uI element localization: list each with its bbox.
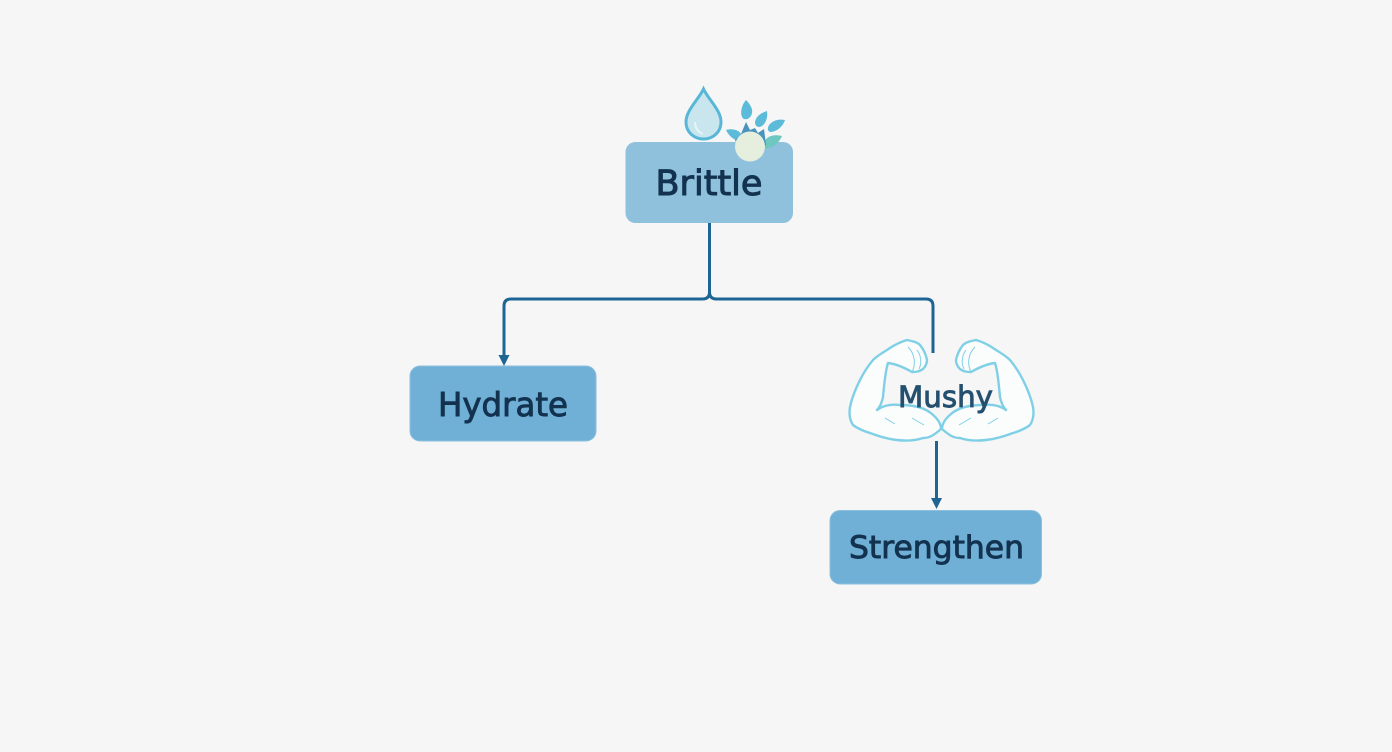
node: Brittle: [626, 142, 793, 223]
arrow: Mushy to Strengthen: [931, 441, 942, 509]
node: Strengthen: Strengthen: [849, 530, 1024, 566]
arrow: Brittle to Hydrate: [498, 223, 710, 366]
connector: Brittle to Mushy: [710, 292, 933, 353]
icon: water drop: [686, 89, 721, 139]
label: Mushy: Mushy: [898, 380, 993, 414]
node: Hydrate: [410, 366, 596, 441]
node: Strengthen: [830, 510, 1042, 584]
icon: flexed arms: [849, 340, 1034, 441]
icon: leaves and flower: [726, 100, 785, 162]
node: Hydrate: Hydrate: [438, 386, 568, 424]
right arm: [942, 340, 1034, 441]
node: Brittle: Brittle: [656, 164, 762, 204]
left arm: [849, 340, 941, 441]
